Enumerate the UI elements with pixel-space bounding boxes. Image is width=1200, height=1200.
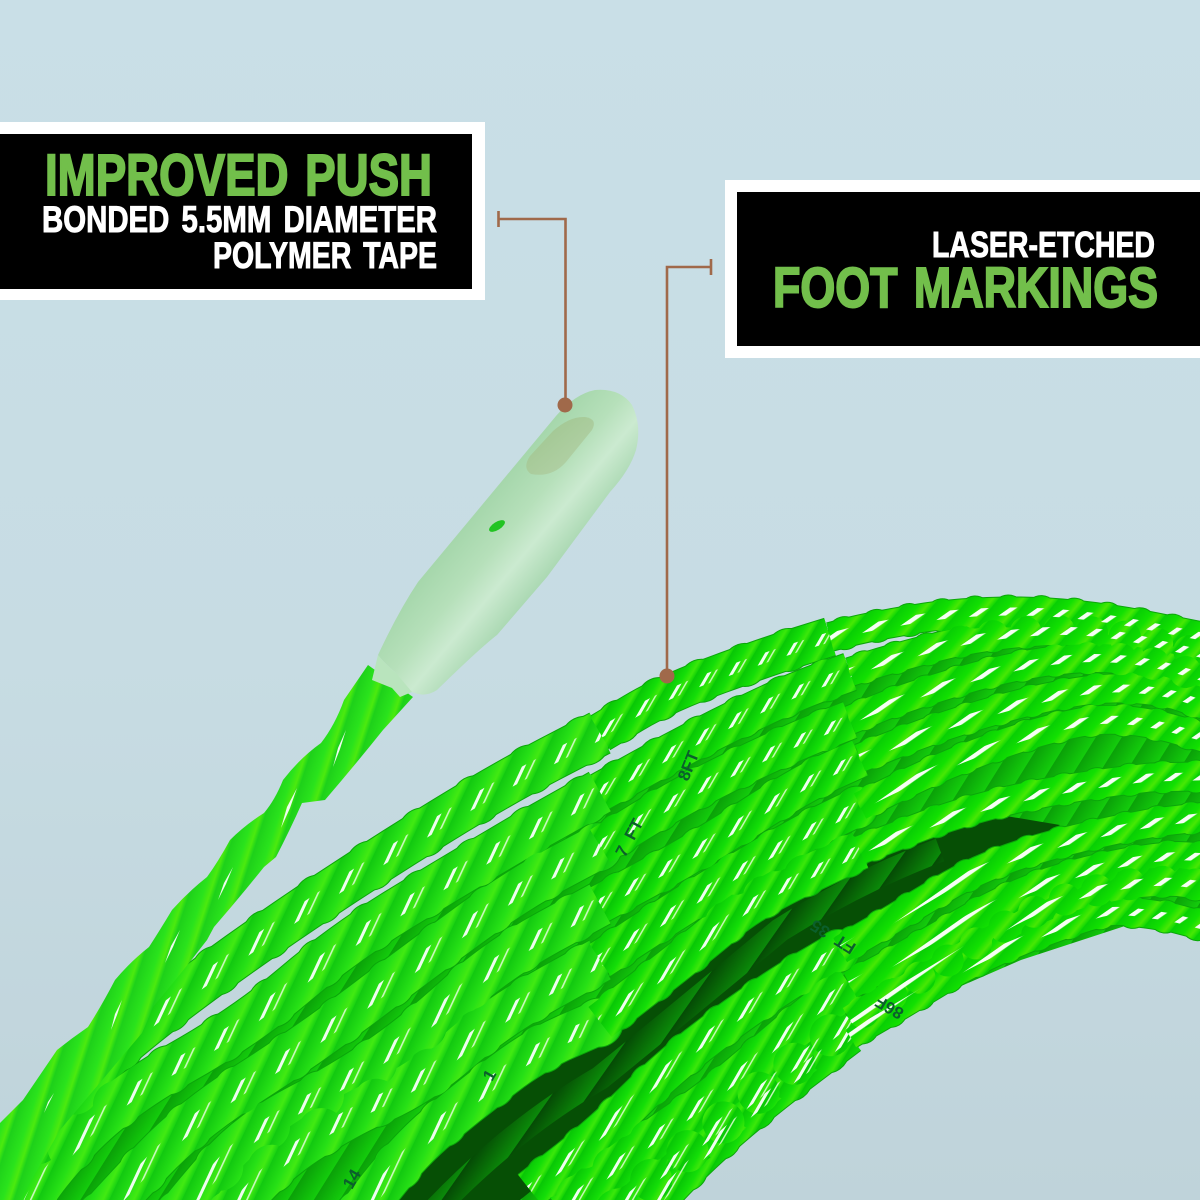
laser-etched foot markings: 14 xyxy=(339,1166,365,1192)
pulling tip capsule xyxy=(372,390,638,697)
laser-etched foot markings: 7 FT xyxy=(612,815,648,860)
strand outer edges xyxy=(0,611,1200,1200)
panel fill xyxy=(0,134,472,289)
leader line to capsule xyxy=(498,211,572,412)
leading tail strand xyxy=(0,665,413,1200)
panel fill xyxy=(737,192,1200,346)
capsule collar xyxy=(372,655,412,697)
strand twisted bodies xyxy=(0,611,1200,1200)
capsule body xyxy=(378,390,638,695)
laser-etched foot markings: FT 35 xyxy=(807,915,859,958)
capsule green hole xyxy=(487,518,507,534)
tail highlights xyxy=(44,730,346,1113)
panel frame xyxy=(725,180,1200,358)
tail silhouette xyxy=(0,665,413,1200)
heading: improved push: IMPROVED PUSH xyxy=(45,143,432,208)
subheading line 1: BONDED 5.5MM DIAMETER xyxy=(42,199,437,240)
laser-etched foot markings: 86F xyxy=(872,992,907,1023)
capsule eyelet slot xyxy=(526,417,594,475)
laser-etched foot markings: 1 xyxy=(479,1066,500,1084)
dark gap between coil layers xyxy=(370,815,1060,1200)
laser-etched foot markings: 8FT xyxy=(674,748,703,783)
laser-etched foot markings xyxy=(339,748,907,1192)
subheading line 2: POLYMER TAPE xyxy=(213,235,437,276)
coil base silhouette xyxy=(0,628,1200,1200)
panel frame xyxy=(0,122,485,300)
strand glossy highlights xyxy=(0,611,1200,1200)
leader line to coil xyxy=(660,259,711,684)
coil of green twisted tape xyxy=(0,611,1200,1200)
callout panel: foot markings xyxy=(725,180,1200,358)
callout panel: improved push xyxy=(0,122,485,300)
